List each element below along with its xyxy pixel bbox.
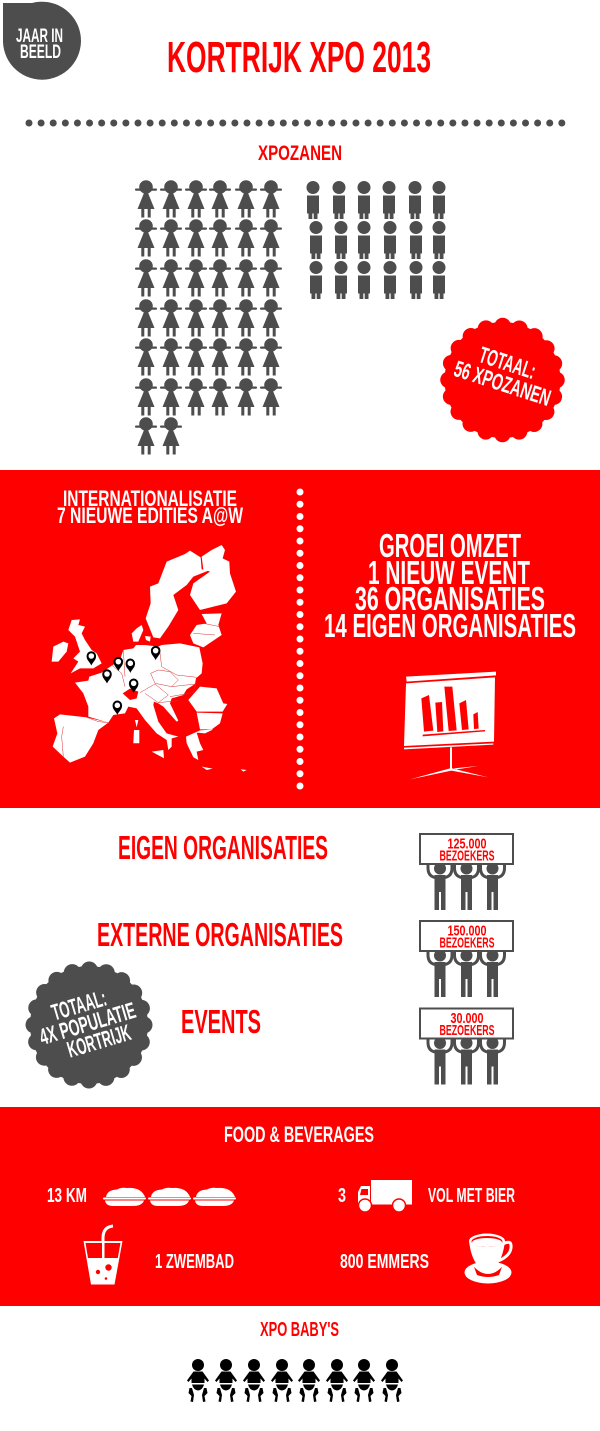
placard: 150.000 bezoekers: 150.000 — [448, 922, 486, 940]
heading: food and beverages: FOOD & BEVERAGES — [224, 1122, 374, 1147]
placard: 150.000 bezoekers — [420, 921, 513, 997]
badge: jaar in beeld — [3, 2, 81, 80]
callout: totaal 56 xpozanen — [444, 322, 561, 438]
text: 13 km: 13 KM — [47, 1185, 87, 1207]
placard: 30.000 bezoekers: 30.000 — [450, 1010, 484, 1027]
heading: xpozanen: XPOZANEN — [258, 142, 342, 165]
text: 1 zwembad: 1 ZWEMBAD — [155, 1251, 234, 1273]
callout: totaal 4x populatie kortrijk: 4X POPULATIE — [36, 997, 139, 1050]
panel: food and beverages — [0, 1107, 600, 1306]
badge: jaar in beeld: JAAR IN — [16, 26, 63, 47]
text: vol met bier: VOL MET BIER — [428, 1185, 515, 1207]
callout: totaal 56 xpozanen: TOTAAL: — [476, 341, 539, 384]
placard: 125.000 bezoekers — [420, 834, 513, 910]
pictogram: babies — [187, 1359, 403, 1402]
pictogram: female employees — [135, 180, 282, 454]
title: KORTRIJK XPO 2013 — [167, 33, 431, 82]
heading: internationalisatie: 7 NIEUWE EDITIES A@W — [57, 503, 243, 528]
panel: internationalisatie and groei — [0, 470, 600, 808]
callout: totaal 4x populatie kortrijk: KORTRIJK — [64, 1019, 134, 1063]
icon: cup and saucer — [464, 1234, 512, 1284]
heading: xpo baby's: XPO BABY'S — [260, 1319, 339, 1341]
label: events: EVENTS — [181, 1003, 261, 1040]
callout: totaal 4x populatie kortrijk — [30, 966, 148, 1084]
placard: 30.000 bezoekers — [420, 1008, 513, 1084]
callout: totaal 4x populatie kortrijk: TOTAAL: — [48, 985, 109, 1025]
icon: truck — [358, 1180, 412, 1212]
text: 800 emmers: 800 EMMERS — [340, 1251, 429, 1273]
icon: presentation board — [404, 672, 496, 779]
map: europe — [52, 545, 247, 772]
heading: internationalisatie: INTERNATIONALISATIE — [63, 486, 237, 511]
icon: drink — [84, 1226, 122, 1284]
placard: 125.000 bezoekers: 125.000 — [448, 836, 486, 852]
pictogram: male employees — [306, 181, 446, 299]
heading: internationalisatie — [57, 486, 243, 528]
dotted divider — [29, 120, 563, 126]
placard: 30.000 bezoekers: BEZOEKERS — [440, 1022, 494, 1039]
text block: groei omzet — [324, 527, 576, 644]
badge: jaar in beeld: BEELD — [20, 42, 61, 63]
map pins — [87, 646, 160, 715]
placard: 125.000 bezoekers: BEZOEKERS — [440, 848, 494, 864]
placard: 150.000 bezoekers: BEZOEKERS — [440, 934, 494, 952]
text: 3: 3 — [338, 1185, 346, 1207]
label: externe organisaties: EXTERNE ORGANISATIES — [97, 916, 343, 953]
label: eigen organisaties: EIGEN ORGANISATIES — [118, 829, 328, 866]
icon: sandwiches — [103, 1188, 236, 1206]
dotted vertical divider — [296, 492, 304, 787]
